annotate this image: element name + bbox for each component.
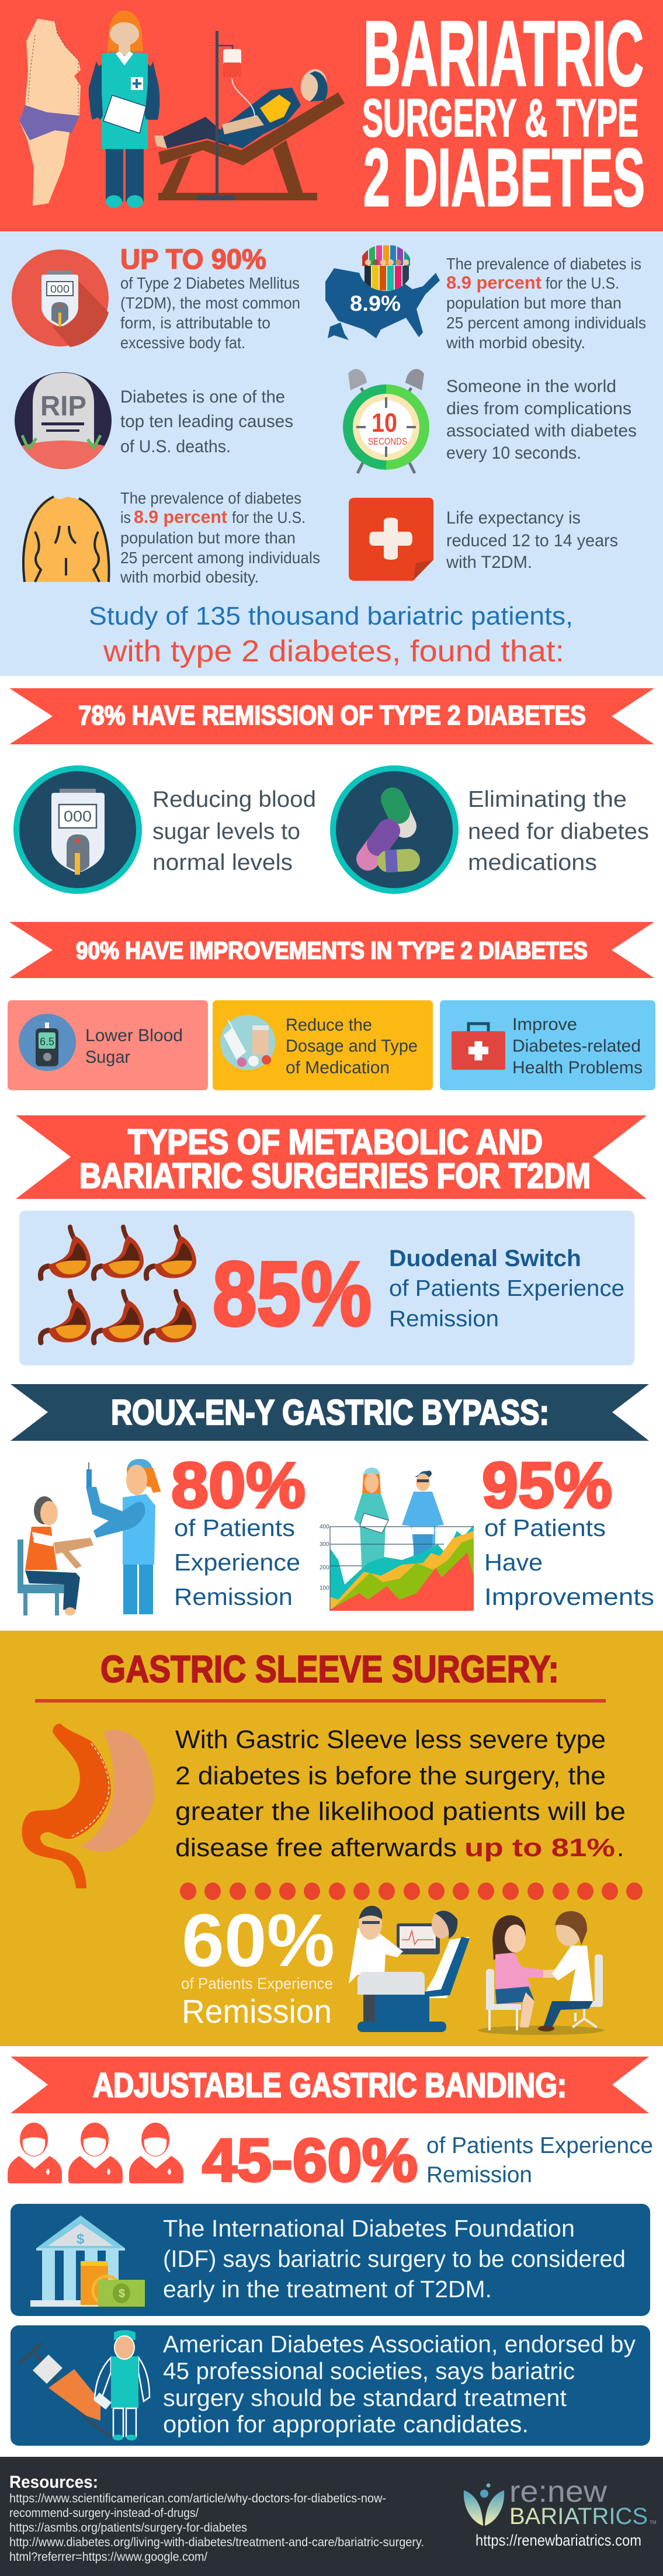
icon: usa map with crowd — [325, 244, 440, 340]
text: life expectancy: reduced 12 to 14 years — [446, 531, 618, 550]
text: idf recommendation: The International Diabetes Foundation — [163, 2215, 575, 2242]
text: resources: https://asmbs.org/patients/surgery-for-diabetes — [9, 2521, 247, 2535]
banner: 90 percent improvements: 90% HAVE IMPROVEMENTS IN TYPE 2 DIABETES — [76, 937, 588, 964]
text: ada recommendation: option for appropriate candidates. — [163, 2411, 529, 2438]
text: life expectancy: Life expectancy is — [446, 508, 581, 528]
stat: 95 percent improvements: Improvements — [484, 1583, 654, 1610]
text: eliminating medications: need for diabetes — [468, 819, 649, 844]
text: idf recommendation — [163, 2215, 626, 2303]
text: every 10 seconds: dies from complications — [446, 399, 631, 418]
text: lower blood sugar: Lower Blood — [85, 1026, 183, 1045]
heading: study: with type 2 diabetes, found that: — [103, 635, 564, 668]
banner: 78 percent remission: 78% HAVE REMISSION OF TYPE 2 DIABETES — [78, 700, 586, 730]
text: prevalence second: for the U.S. — [232, 508, 306, 526]
text: reducing blood sugar: Reducing blood — [152, 787, 316, 812]
stat: up to 90 percent: excessive body fat. — [120, 334, 245, 352]
stat: 85 percent: 85% — [213, 1243, 372, 1345]
panel: gastric sleeve — [0, 1631, 663, 2046]
text: reducing blood sugar: normal levels — [152, 850, 293, 875]
logo: renew bariatrics: TM — [650, 2520, 657, 2525]
text: prevalence: 25 percent among individuals — [446, 314, 646, 332]
text: eliminating medications — [468, 787, 649, 875]
icon: glucose meter circle — [12, 249, 109, 347]
stat: 80 percent remission: of Patients — [174, 1514, 295, 1541]
text: prevalence second: is — [120, 508, 131, 526]
illustration: doctors and area chart: 400 — [320, 1524, 329, 1530]
icon: gravestone — [12, 372, 114, 473]
text: lower blood sugar — [85, 1026, 183, 1067]
text: prevalence: The prevalence of diabetes is — [446, 255, 641, 273]
text: duodenal switch: Duodenal Switch — [389, 1246, 581, 1271]
title — [362, 2, 645, 223]
text: improve health — [512, 1015, 643, 1077]
banner: types of surgeries — [16, 1115, 647, 1199]
logo: renew bariatrics: BARIATRICS — [509, 2504, 648, 2529]
icon: usa map with crowd: 8.9% — [350, 292, 401, 316]
stat: 60 percent remission: of Patients Experience — [181, 1975, 333, 1992]
text: prevalence second: with morbid obesity. — [120, 568, 259, 586]
icon: medical cross note — [349, 498, 433, 581]
banner: 78 percent remission — [9, 688, 654, 744]
illustration: doctors and area chart: 200 — [320, 1565, 329, 1571]
text: idf recommendation: early in the treatment of T2DM. — [163, 2276, 492, 2303]
illustration: nurse — [89, 11, 159, 208]
text: patients experience remission: of Patients Experience — [426, 2133, 653, 2158]
stat: up to 90 percent: form, is attributable to — [120, 314, 270, 332]
text: top ten causes — [120, 387, 293, 456]
panel: american diabetes association — [11, 2325, 650, 2446]
text: every 10 seconds: every 10 seconds. — [446, 443, 581, 463]
icon: glucose meter badge — [13, 765, 142, 894]
text: resources — [9, 2473, 424, 2564]
logo: renew bariatrics: re:new — [509, 2475, 607, 2509]
text: every 10 seconds — [446, 377, 637, 463]
banner: types of surgeries: BARIATRIC SURGERIES FOR T2DM — [79, 1156, 591, 1195]
illustration: doctors and area chart: 300 — [320, 1541, 329, 1548]
icon: first aid kit — [452, 1024, 505, 1070]
icon: ten second clock: SECONDS — [368, 436, 407, 447]
icon: gravestone: RIP — [40, 391, 86, 422]
panel: footer — [0, 2457, 663, 2576]
text: ada recommendation — [163, 2331, 636, 2438]
logo: renew bariatrics — [464, 2475, 657, 2549]
text: sleeve description — [175, 1725, 626, 1862]
stat: 45-60 percent: 45-60% — [202, 2127, 418, 2194]
text: improve health: Diabetes-related — [512, 1036, 641, 1056]
illustration: nurse giving injection — [18, 1459, 161, 1615]
text: prevalence: population but more than — [446, 294, 622, 312]
stat: 95 percent improvements: 95% — [482, 1450, 612, 1521]
text: prevalence second: 8.9 percent — [134, 507, 227, 527]
text: lower blood sugar: Sugar — [85, 1048, 130, 1067]
stat: up to 90 percent: UP TO 90% — [120, 244, 266, 275]
text: sleeve description: disease free afterwards — [175, 1833, 457, 1862]
stat: up to 90 percent: of Type 2 Diabetes Mellitus — [120, 274, 300, 292]
icon: sleeve stomach — [22, 1724, 154, 1888]
text: top ten causes: top ten leading causes — [120, 412, 293, 431]
text: resources: https://www.scientificamerican.com/article/why-doctors-for-diabetics-now- — [9, 2492, 386, 2505]
text: life expectancy — [446, 508, 618, 572]
stat: 95 percent improvements — [482, 1450, 654, 1610]
banner: roux-en-y: ROUX-EN-Y GASTRIC BYPASS: — [111, 1393, 549, 1432]
illustration: doctors and area chart — [320, 1468, 474, 1611]
stat: 80 percent remission: Remission — [174, 1583, 293, 1610]
text: life expectancy: with T2DM. — [446, 553, 532, 572]
heading: study — [89, 602, 573, 668]
stat: 80 percent remission — [171, 1450, 306, 1610]
text: prevalence — [446, 255, 646, 352]
text: duodenal switch: Remission — [389, 1306, 499, 1332]
text: patients experience remission — [426, 2133, 653, 2187]
stat: up to 90 percent — [120, 244, 300, 352]
text: ada recommendation: surgery should be standard treatment — [163, 2384, 567, 2411]
illustration: patient on reclining chair with drip — [154, 31, 345, 200]
text: patients experience remission: Remission — [426, 2162, 532, 2187]
text: improve health: Improve — [512, 1015, 577, 1034]
text: sleeve description: . — [617, 1833, 624, 1862]
text: duodenal switch: of Patients Experience — [389, 1276, 624, 1301]
icon: glucose meter badge: 000 — [64, 807, 92, 825]
logo: renew bariatrics: https://renewbariatrics.com — [475, 2532, 641, 2549]
card: reduce dosage — [213, 1000, 433, 1090]
text: reduce dosage: of Medication — [286, 1058, 390, 1077]
text: eliminating medications: medications — [468, 850, 597, 875]
text: duodenal switch — [389, 1246, 624, 1332]
icon: syringe and doctor — [19, 2330, 150, 2440]
text: sleeve description: 2 diabetes is before the surgery, the — [175, 1762, 606, 1790]
text: improve health: Health Problems — [512, 1058, 643, 1077]
card: lower blood sugar — [8, 1000, 208, 1090]
card: improve health — [440, 1000, 655, 1090]
stat: 80 percent remission: Experience — [174, 1549, 300, 1576]
stat: 60 percent remission: Remission — [182, 1993, 332, 2030]
stat: 60 percent remission — [181, 1899, 335, 2030]
text: prevalence second: The prevalence of diabetes — [120, 489, 301, 507]
text: resources: Resources: — [9, 2473, 98, 2492]
text: prevalence second: 25 percent among individuals — [120, 549, 320, 567]
panel: duodenal switch — [19, 1211, 634, 1365]
text: sleeve description: greater the likelihood patients will be — [175, 1797, 626, 1826]
text: every 10 seconds: associated with diabetes — [446, 421, 637, 441]
banner: types of surgeries: TYPES OF METABOLIC AND — [128, 1122, 543, 1162]
text: prevalence second: population but more than — [120, 529, 296, 547]
text: sleeve description: up to 81% — [464, 1833, 615, 1862]
icons: stomachs — [40, 1227, 196, 1343]
stat: up to 90 percent: (T2DM), the most common — [120, 294, 300, 312]
heading: study: Study of 135 thousand bariatric patients, — [89, 602, 573, 630]
text: top ten causes: of U.S. deaths. — [120, 437, 231, 456]
banner: 90 percent improvements — [9, 922, 654, 978]
icon: pills badge — [330, 765, 459, 894]
text: prevalence: for the U.S. — [546, 274, 619, 292]
stat: 95 percent improvements: of Patients — [484, 1514, 606, 1541]
icon: handheld meter — [19, 1014, 76, 1071]
illustration: doctors and area chart: 100 — [320, 1585, 329, 1592]
text: reduce dosage: Dosage and Type — [286, 1036, 418, 1056]
text: eliminating medications: Eliminating the — [468, 787, 627, 812]
illustration: doctor examining patient — [478, 1911, 604, 2035]
stat: 60 percent remission: 60% — [182, 1899, 335, 1982]
panel: international diabetes foundation — [11, 2204, 650, 2316]
banner: adjustable gastric banding — [11, 2057, 649, 2113]
stat: 80 percent remission: 80% — [171, 1450, 306, 1521]
heading: gastric sleeve: GASTRIC SLEEVE SURGERY: — [100, 1648, 559, 1690]
icon: syringe and pills — [220, 1015, 275, 1070]
icon: glucose meter circle: 000 — [50, 283, 70, 295]
text: prevalence: with morbid obesity. — [446, 334, 585, 352]
icon: back with obesity — [23, 497, 109, 582]
illustration: doctor with monitor and patient — [349, 1906, 470, 2032]
panel: diabetes facts — [0, 231, 663, 676]
text: idf recommendation: (IDF) says bariatric surgery to be considered — [163, 2245, 626, 2272]
text: top ten causes: Diabetes is one of the — [120, 387, 285, 407]
icon: handheld meter: 6.5 — [40, 1036, 54, 1048]
illustration: torso — [19, 19, 81, 206]
text: ada recommendation: American Diabetes Association, endorsed by — [163, 2331, 636, 2357]
banner: roux-en-y — [11, 1384, 649, 1441]
text: prevalence: 8.9 percent — [446, 272, 541, 293]
text: reducing blood sugar: sugar levels to — [152, 819, 300, 844]
text: ada recommendation: 45 professional societies, says bariatric — [163, 2357, 575, 2384]
text: reduce dosage: Reduce the — [286, 1015, 372, 1035]
text: sleeve description: With Gastric Sleeve less severe type — [175, 1725, 606, 1754]
icon: bank with money: $ — [119, 2287, 125, 2300]
text: resources: recommend-surgery-instead-of-drugs/ — [9, 2506, 199, 2520]
text: resources: http://www.diabetes.org/living-with-diabetes/treatment-and-care/bariatric-surgery. — [9, 2536, 424, 2549]
icon: ten second clock — [343, 369, 429, 473]
text: resources: html?referrer=https://www.google.com/ — [9, 2550, 207, 2564]
decorative dots row — [180, 1882, 643, 1900]
panel: header — [0, 0, 663, 231]
text: reducing blood sugar — [152, 787, 316, 875]
text: reduce dosage — [286, 1015, 418, 1077]
icons: three patients — [8, 2123, 183, 2183]
text: every 10 seconds: Someone in the world — [446, 377, 616, 396]
icon: bank with money — [30, 2216, 145, 2307]
stat: 95 percent improvements: Have — [484, 1549, 543, 1576]
icon: ten second clock: 10 — [372, 408, 397, 438]
text: prevalence second — [120, 489, 320, 586]
icon: bank with money: $ — [77, 2231, 85, 2247]
banner: adjustable gastric banding: ADJUSTABLE GASTRIC BANDING: — [93, 2067, 567, 2105]
